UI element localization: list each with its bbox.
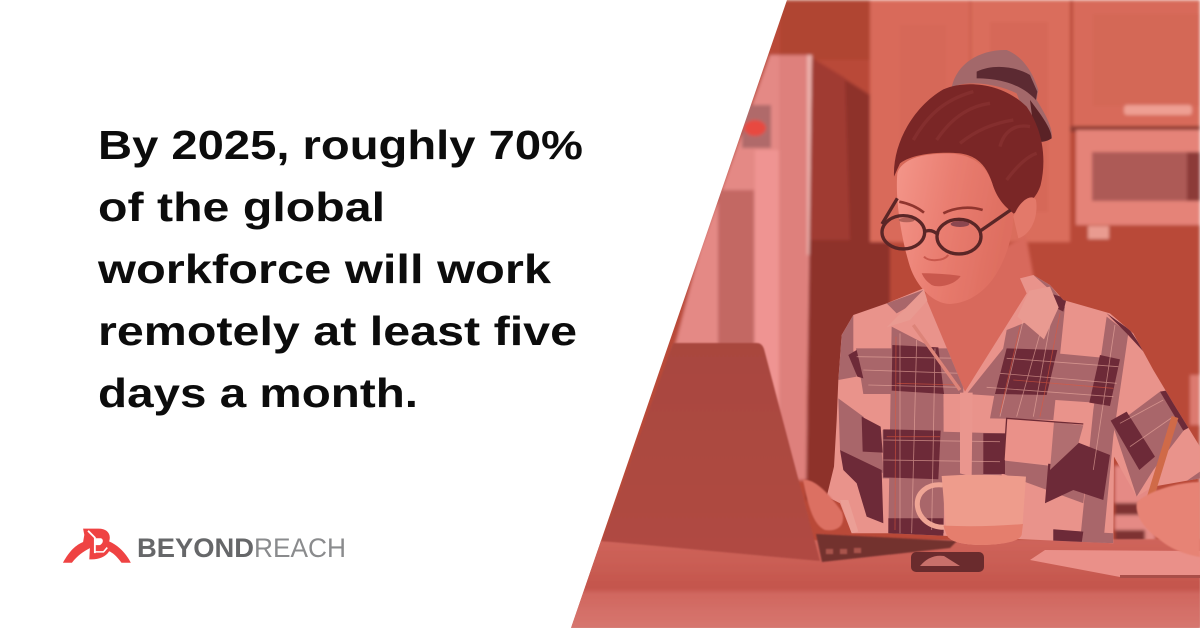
headline statistic: By 2025, roughly 70% xyxy=(98,122,583,168)
table xyxy=(560,539,1200,628)
scarf bun xyxy=(952,50,1052,142)
pocket xyxy=(1004,455,1051,464)
headline statistic: remotely at least five xyxy=(98,308,577,354)
fridge side xyxy=(806,58,890,500)
pencil xyxy=(1148,417,1175,505)
phone xyxy=(911,552,984,572)
fridge magnet xyxy=(742,105,771,148)
collar xyxy=(905,290,928,308)
lips xyxy=(922,273,961,286)
logo: Beyond Reach: REACH xyxy=(254,533,346,563)
mug xyxy=(917,475,1026,545)
neck xyxy=(924,241,1034,392)
dark plaid blocks xyxy=(840,293,1191,543)
grey plaid bands xyxy=(838,275,1200,543)
light cuff xyxy=(840,500,858,533)
logo: Beyond Reach xyxy=(63,529,346,563)
wordmark: BEYOND xyxy=(137,533,254,563)
lower right appliance xyxy=(1115,466,1155,556)
fridge xyxy=(674,52,812,379)
shirt xyxy=(827,275,1200,543)
brows and eyes xyxy=(899,202,983,213)
headline statistic: days a month. xyxy=(98,370,418,416)
icon: logo mark xyxy=(63,529,131,563)
ear xyxy=(1013,197,1037,238)
hair xyxy=(894,84,1043,217)
microwave xyxy=(1076,130,1200,225)
shirt base xyxy=(827,275,1200,543)
photo panel: woman working at laptop in kitchen, red overlay xyxy=(560,0,1200,628)
neckline placket edge xyxy=(913,325,960,390)
notebook xyxy=(1030,550,1200,578)
laptop xyxy=(602,343,957,562)
kitchen background xyxy=(560,0,1200,628)
nose shadow xyxy=(924,255,948,260)
headline statistic xyxy=(97,122,583,416)
icon: glasses xyxy=(882,198,1011,254)
head xyxy=(882,50,1052,304)
hand on laptop xyxy=(803,480,843,530)
woman xyxy=(827,50,1200,543)
writing hand xyxy=(1137,482,1200,557)
fine plaid lines xyxy=(857,307,1173,533)
headline statistic: of the global xyxy=(98,184,385,230)
placket xyxy=(960,393,973,477)
face xyxy=(897,154,1013,304)
headline statistic: workforce will work xyxy=(97,246,551,292)
